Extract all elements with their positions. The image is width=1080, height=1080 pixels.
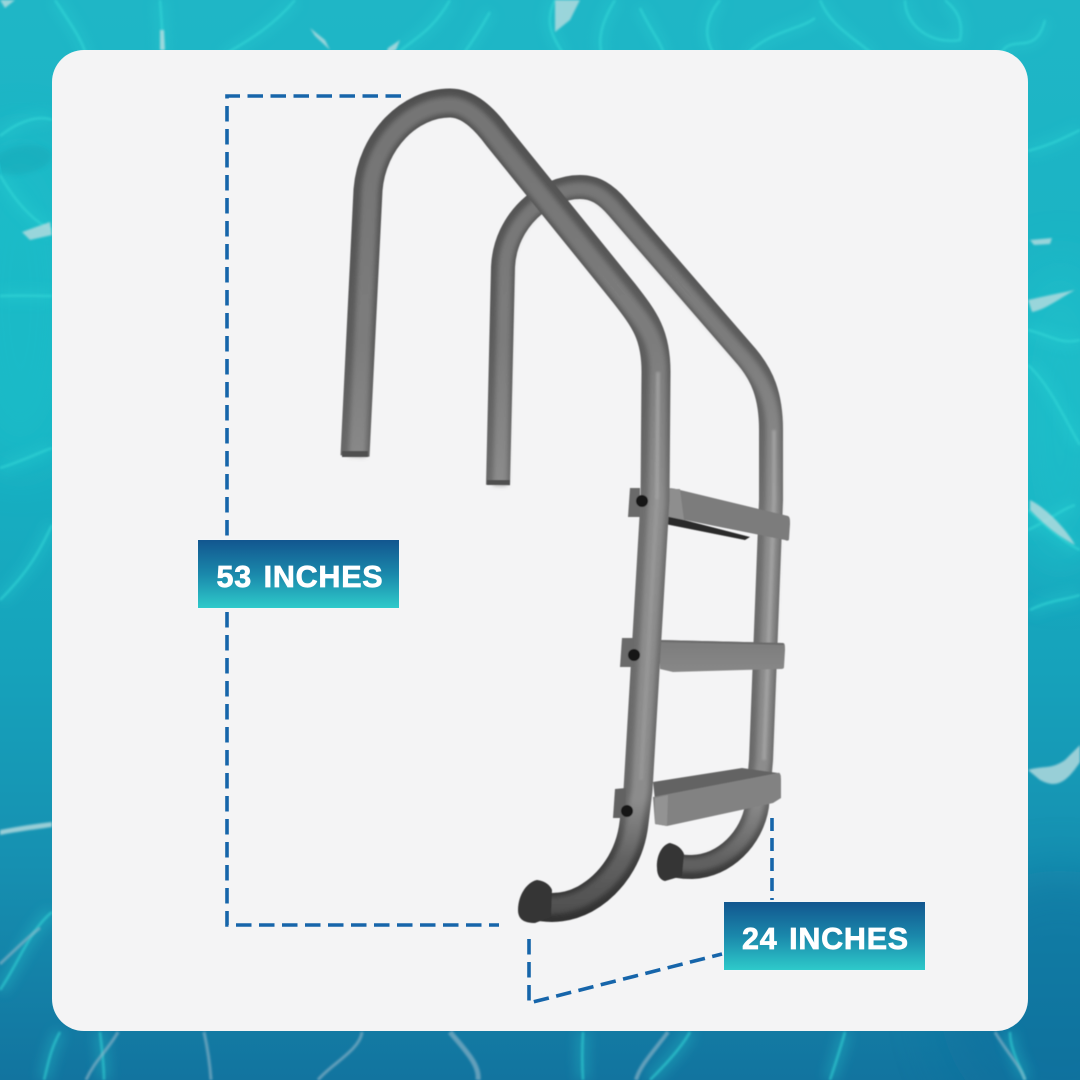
step: middle [660,640,785,672]
label: 24 inches [724,902,926,970]
rear handrail tube [498,187,774,867]
rear foot cap [657,843,684,881]
handrail end caps [342,451,510,485]
brackets and bolts [613,488,648,818]
width dimension line: lower [529,939,722,1003]
front handrail tube [355,103,658,907]
step: bottom [653,768,781,826]
front foot cap [518,880,552,923]
label: 53 inches: 53 INCHES [216,560,383,594]
height dimension line [227,96,499,925]
step: top [665,488,790,541]
pool ladder illustration [342,103,790,923]
label: 53 inches [198,540,400,608]
depth dimension line: vertical [770,818,774,900]
label: 24 inches: 24 INCHES [742,922,909,956]
